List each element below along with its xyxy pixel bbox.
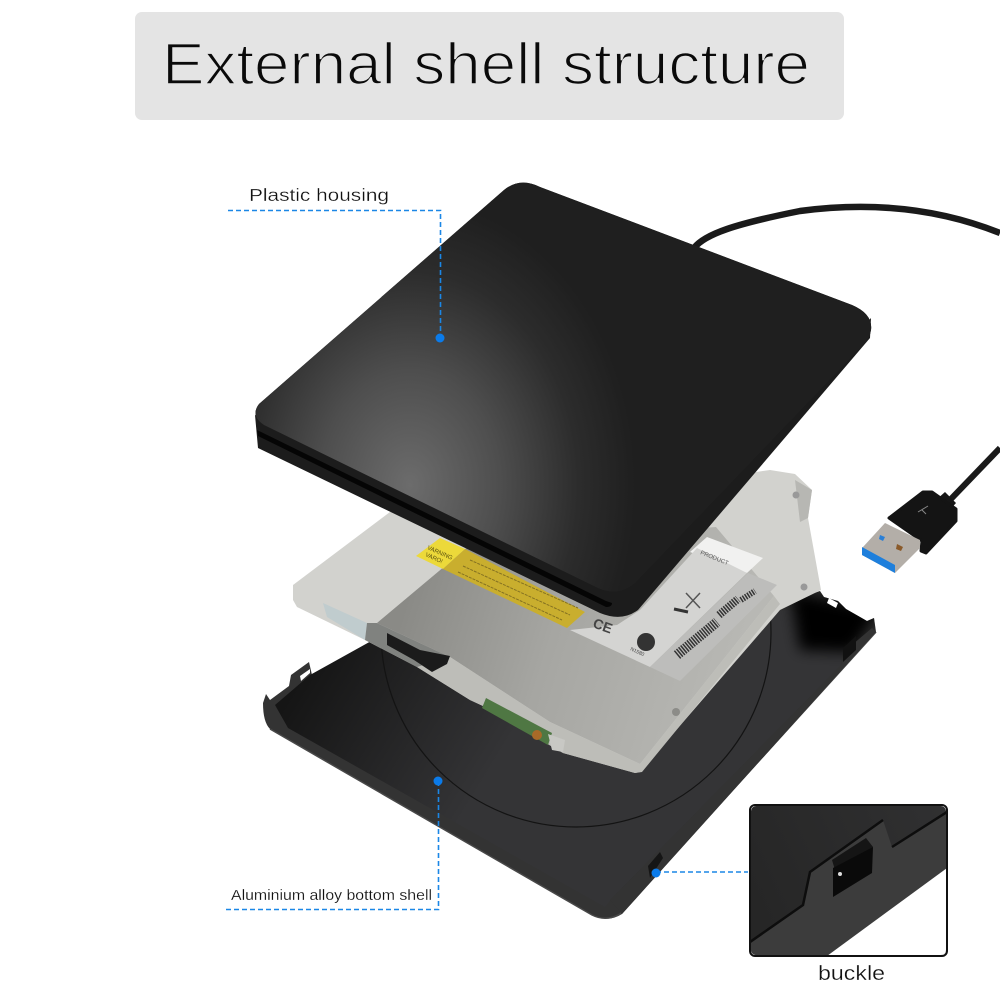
drive right flange	[795, 480, 812, 522]
title text: External shell structure	[162, 32, 810, 97]
label text CE: CE	[591, 615, 615, 636]
label text: Plastic housing	[249, 185, 389, 205]
title banner	[135, 12, 844, 120]
tab hole top right	[827, 598, 838, 608]
drive shaded portion under shell	[377, 527, 774, 764]
side buckle notch	[843, 636, 856, 662]
bottom shell tray	[263, 591, 876, 919]
buckle caption: buckle	[818, 962, 885, 985]
plug hole blue	[879, 535, 885, 541]
callout: buckle leader	[652, 868, 748, 878]
leader line	[656, 871, 748, 873]
right side band	[610, 628, 876, 914]
disc slot	[257, 430, 612, 607]
yellow warning label bright	[416, 538, 465, 569]
black latch	[387, 633, 450, 672]
plug hole orange	[896, 544, 903, 551]
barcode 2	[719, 599, 738, 615]
top face sheen	[255, 183, 871, 592]
top face	[255, 183, 871, 592]
yellow warning label dark	[443, 549, 585, 628]
leader line	[228, 210, 440, 336]
barcode sticker	[650, 573, 777, 681]
front shaded strip	[365, 623, 450, 667]
buckle slit	[832, 838, 873, 870]
barcode 3	[741, 591, 755, 600]
dot	[434, 776, 442, 786]
callout: aluminium alloy bottom shell	[226, 776, 442, 910]
outer shell body	[263, 591, 876, 919]
corner buckle notch	[648, 852, 663, 878]
screw	[672, 708, 680, 716]
edge highlight	[270, 632, 876, 918]
disc recess circle	[381, 437, 771, 827]
inset frame	[750, 805, 947, 956]
label text N1580: N1580	[629, 646, 645, 658]
side band	[255, 318, 871, 617]
dot	[652, 868, 660, 878]
inset photo: buckle detail	[750, 805, 947, 956]
callout: plastic housing	[228, 185, 444, 342]
front rim of drive	[417, 596, 780, 773]
window glint	[838, 872, 842, 876]
buckle window	[833, 847, 873, 897]
label text: Aluminium alloy bottom shell	[231, 888, 432, 904]
label icon recycling	[686, 593, 700, 608]
USB cable behind housing	[694, 207, 1000, 248]
warning words: VARNING	[426, 545, 453, 562]
barcode 1	[677, 622, 717, 655]
white product label	[690, 537, 763, 573]
wall top edge	[750, 812, 947, 942]
dot	[436, 334, 444, 342]
optical drive	[293, 470, 821, 773]
white background corner	[827, 868, 947, 956]
USB plug	[862, 448, 1000, 573]
warning words second: VARO!	[424, 552, 444, 565]
pcb	[482, 698, 552, 745]
drive body, lighter portion	[293, 470, 821, 773]
shell wall	[750, 812, 947, 956]
dark inner wall right	[790, 590, 880, 652]
USB logo mark	[918, 506, 928, 514]
inset content	[750, 805, 947, 956]
label text product: PRODUCT	[699, 550, 729, 567]
strain relief	[936, 492, 956, 512]
pcb button	[532, 730, 542, 740]
label dash	[674, 609, 688, 612]
label icon c-tick	[637, 633, 655, 651]
plug metal shell	[862, 523, 920, 573]
leader line	[226, 783, 438, 910]
tab hole top left	[300, 669, 310, 681]
screw right	[800, 584, 808, 590]
plastic housing top shell	[255, 183, 871, 617]
shell floor	[275, 610, 845, 907]
plug cable	[950, 448, 1000, 500]
front opening slot	[323, 603, 367, 640]
plug black housing	[889, 492, 956, 553]
plug blue tongue	[862, 547, 895, 573]
grey label	[570, 548, 747, 667]
metal bracket	[548, 734, 565, 752]
screw upper	[792, 492, 800, 498]
warning lines	[458, 560, 578, 620]
